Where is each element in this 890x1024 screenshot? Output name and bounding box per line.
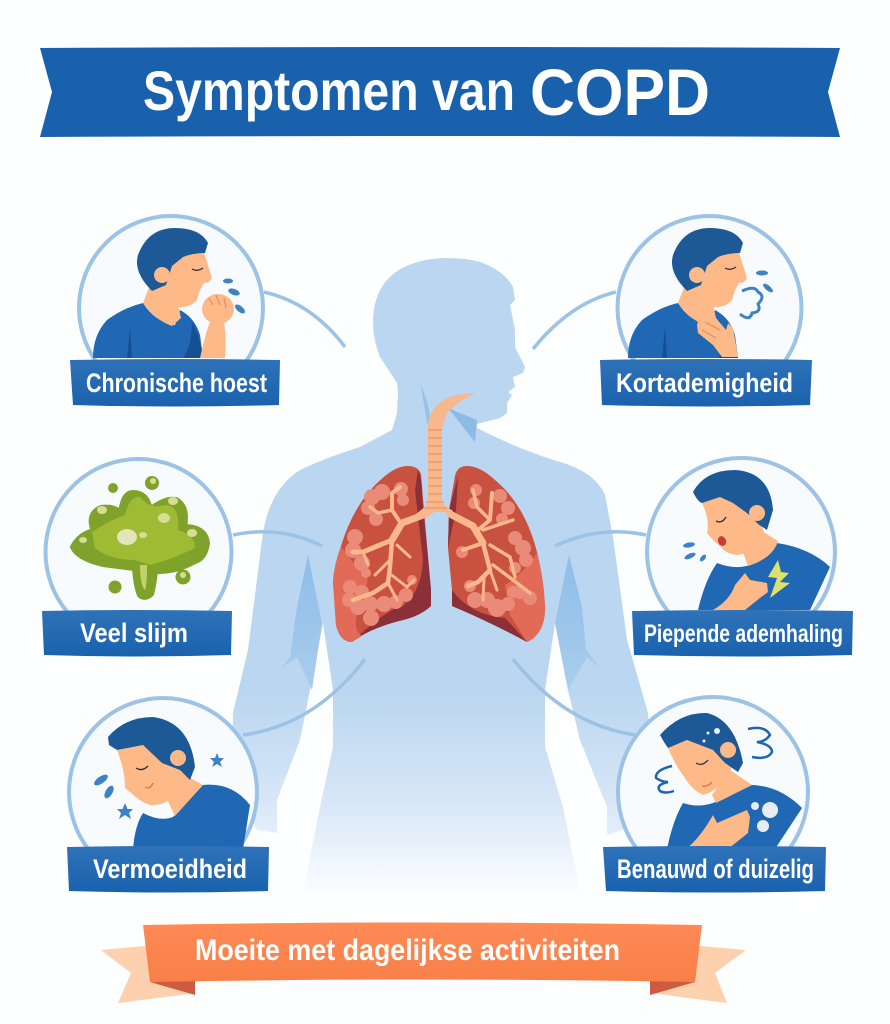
left lung lower lobe [333,547,368,642]
person short of breath [628,228,774,358]
label [67,846,269,892]
ribbon body [143,922,702,982]
trachea [416,393,476,518]
panel: veel slijm [42,459,232,656]
panel: benauwd of duizelig [603,697,826,892]
label: Vermoeidheid [93,854,247,884]
right lung shade [448,476,527,642]
title text: Symptomen van [143,59,515,122]
circle [79,216,263,400]
circle [618,697,808,887]
alveoli right [456,484,537,617]
circle [69,698,257,886]
ribbon left tail [101,946,196,1003]
ribbon left fold [150,980,195,995]
panel: piepende ademhaling [632,458,853,656]
bronchi left [353,487,426,600]
body shade: left arm wedge [282,555,322,690]
label: Veel slijm [80,618,188,648]
body silhouette [232,258,652,893]
lungs illustration [333,393,545,642]
panel: chronische hoest [70,216,280,406]
body shade: right arm wedge [555,555,600,690]
panel: vermoeidheid [67,698,269,892]
bottom ribbon [101,922,746,1003]
label: Benauwd of duizelig [617,854,814,884]
label [42,610,232,656]
title banner [40,47,840,137]
left lung dark edge [352,470,431,642]
body shade: neck left [421,386,432,424]
body shade: neck right [448,408,477,442]
circle [647,458,835,646]
label: Kortademigheid [616,368,793,398]
right lung [448,466,545,642]
person wheezing [683,470,830,610]
label [600,359,812,406]
label [603,846,826,892]
label: Chronische hoest [86,368,267,398]
right lung lower lobe [505,553,545,642]
bronchi right [450,490,530,600]
ribbon right tail [650,946,746,1003]
ribbon right fold [650,980,695,995]
icon: green mucus [73,476,207,597]
title banner: COPD [530,55,710,129]
left lung [333,466,431,642]
connector lines [233,292,646,735]
ribbon text: Moeite met dagelijkse activiteiten [195,934,620,967]
person dizzy [656,713,802,849]
label [632,610,853,656]
label [70,359,280,406]
circle [46,459,232,645]
person tired [92,717,250,849]
trachea rings [424,430,447,508]
panel: kortademigheid [600,216,812,406]
person coughing [93,228,247,358]
circle [618,216,802,400]
alveoli left [342,482,417,626]
